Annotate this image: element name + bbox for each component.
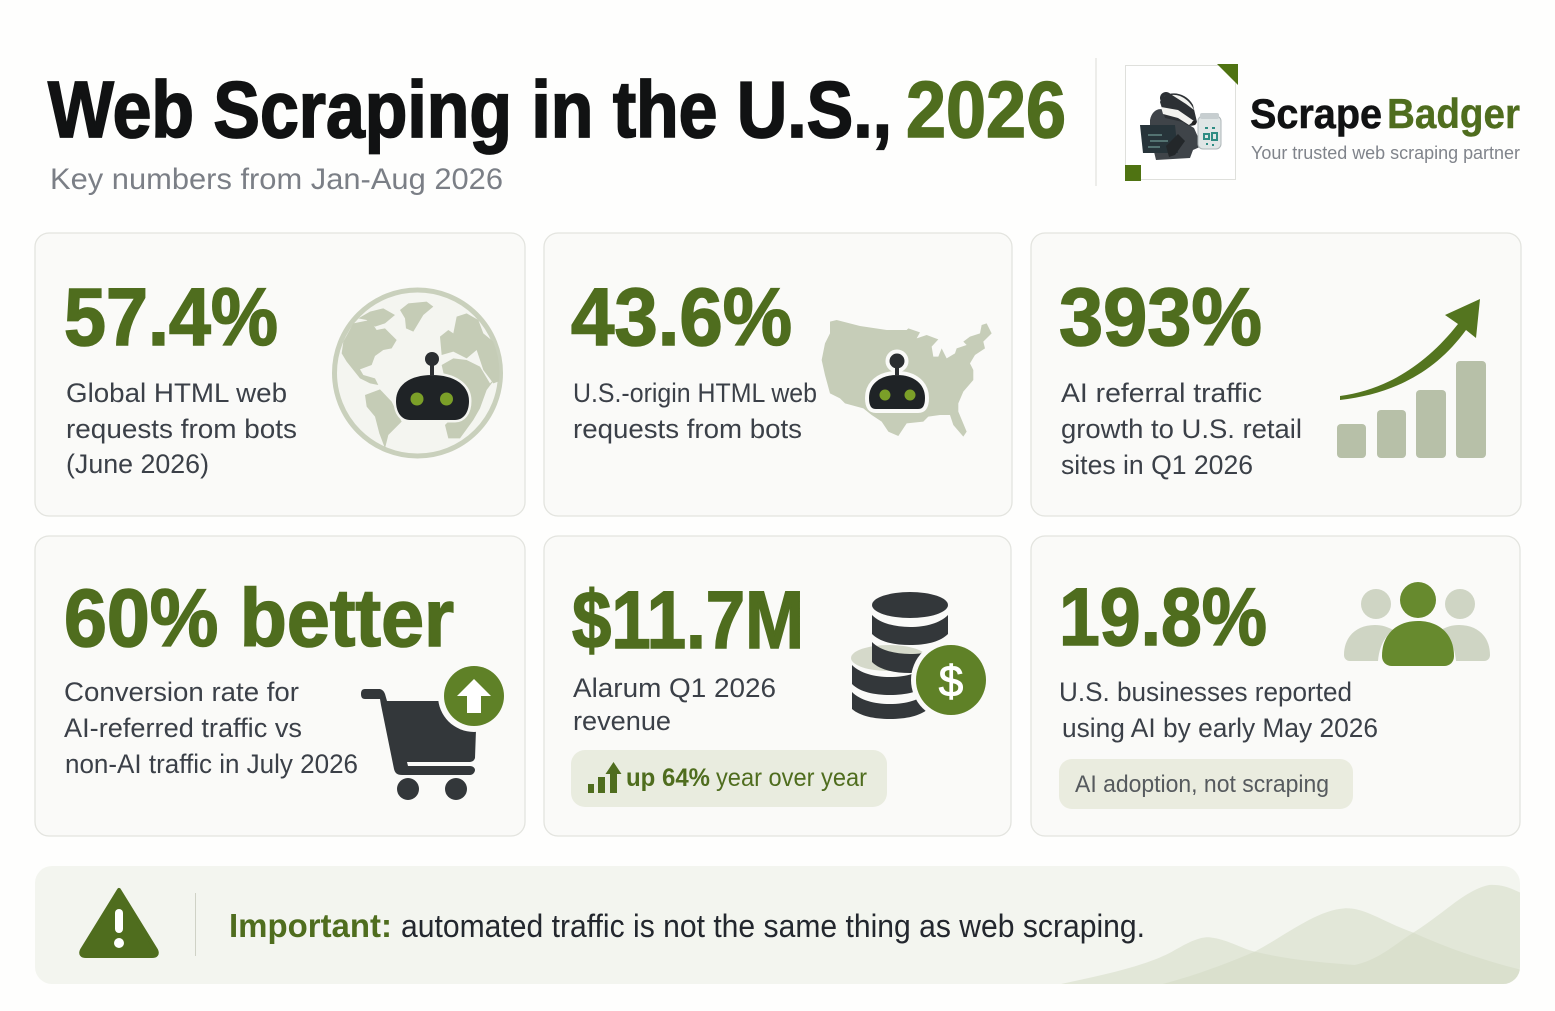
callout text: automated traffic is not the same thing as web scraping.: [401, 908, 1145, 944]
panel: U.S. bots: [544, 233, 1012, 516]
description: AI adoption: using AI by early May 2026: [1062, 713, 1378, 743]
brand name: Scrape: [1250, 90, 1382, 137]
panel: conversion rate: [35, 536, 525, 836]
stat: 393%: 393%: [1059, 272, 1262, 363]
description: conversion rate: non-AI traffic in July 2026: [65, 749, 358, 779]
stat: $11.7M: $11.7M: [572, 575, 804, 666]
description: conversion rate: Conversion rate for: [64, 677, 299, 707]
callout text: Important:: [229, 907, 392, 944]
stat: 57.4%: 57.4%: [64, 272, 278, 363]
badge: up 64% year over year: up 64%: [626, 764, 710, 792]
description: global bots: [66, 378, 297, 479]
subtitle: Key numbers from Jan-Aug 2026: [50, 163, 503, 196]
description: AI referral growth: [1061, 378, 1302, 480]
description: AI adoption: [1059, 677, 1378, 743]
icon: small growth bars: [588, 762, 622, 793]
badge: up 64% year over year: year over year: [716, 764, 867, 792]
description: global bots: Global HTML web: [66, 378, 287, 408]
callout: important note: [35, 866, 1522, 986]
description: AI adoption: U.S. businesses reported: [1059, 677, 1352, 707]
description: Alarum revenue: revenue: [573, 706, 671, 736]
brand name: [1250, 90, 1520, 137]
icon: globe with robot: [334, 290, 503, 456]
panel: Alarum revenue: [544, 536, 1011, 836]
title: Web Scraping in the U.S.,: [48, 65, 892, 154]
stat: 19.8%: 19.8%: [1059, 572, 1267, 663]
icon: warning triangle: [81, 890, 157, 956]
description: U.S. bots: [573, 378, 817, 444]
icon: shopping cart with up arrow: [361, 660, 510, 800]
logo: badger mascot tile: [1125, 64, 1238, 181]
icon: group of people: [1344, 582, 1490, 666]
description: conversion rate: AI-referred traffic vs: [64, 713, 302, 743]
stat: 60% better: 60% better: [64, 573, 454, 664]
title: 2026: [906, 65, 1066, 154]
description: AI referral growth: growth to U.S. retail: [1061, 414, 1302, 444]
description: global bots: requests from bots: [66, 414, 297, 444]
description: AI referral growth: AI referral traffic: [1061, 378, 1262, 408]
description: Alarum revenue: Alarum Q1 2026: [573, 673, 776, 703]
description: AI referral growth: sites in Q1 2026: [1061, 450, 1253, 480]
badge: AI adoption, not scraping: [1059, 759, 1353, 809]
badge: up 64% year over year: [571, 750, 887, 807]
description: U.S. bots: requests from bots: [573, 414, 802, 444]
brand tagline: Your trusted web scraping partner: [1251, 143, 1520, 163]
icon: coin stacks with dollar: [851, 592, 991, 720]
icon: coin stacks with dollar: $: [939, 657, 963, 706]
badge: AI adoption, not scraping: AI adoption, not scraping: [1075, 771, 1329, 798]
icon: rising bar chart with arrow: [1337, 299, 1486, 458]
stat: 43.6%: 43.6%: [571, 272, 792, 363]
panel: AI referral growth: [1031, 233, 1521, 516]
panel: AI adoption: [1031, 536, 1520, 836]
description: global bots: (June 2026): [66, 449, 209, 479]
icon: U.S. map with robot: [822, 320, 992, 437]
description: conversion rate: [64, 677, 358, 779]
description: U.S. bots: U.S.-origin HTML web: [573, 378, 817, 408]
brand name: Badger: [1387, 90, 1520, 137]
description: Alarum revenue: [573, 673, 776, 736]
panel: global bots: [35, 233, 525, 516]
